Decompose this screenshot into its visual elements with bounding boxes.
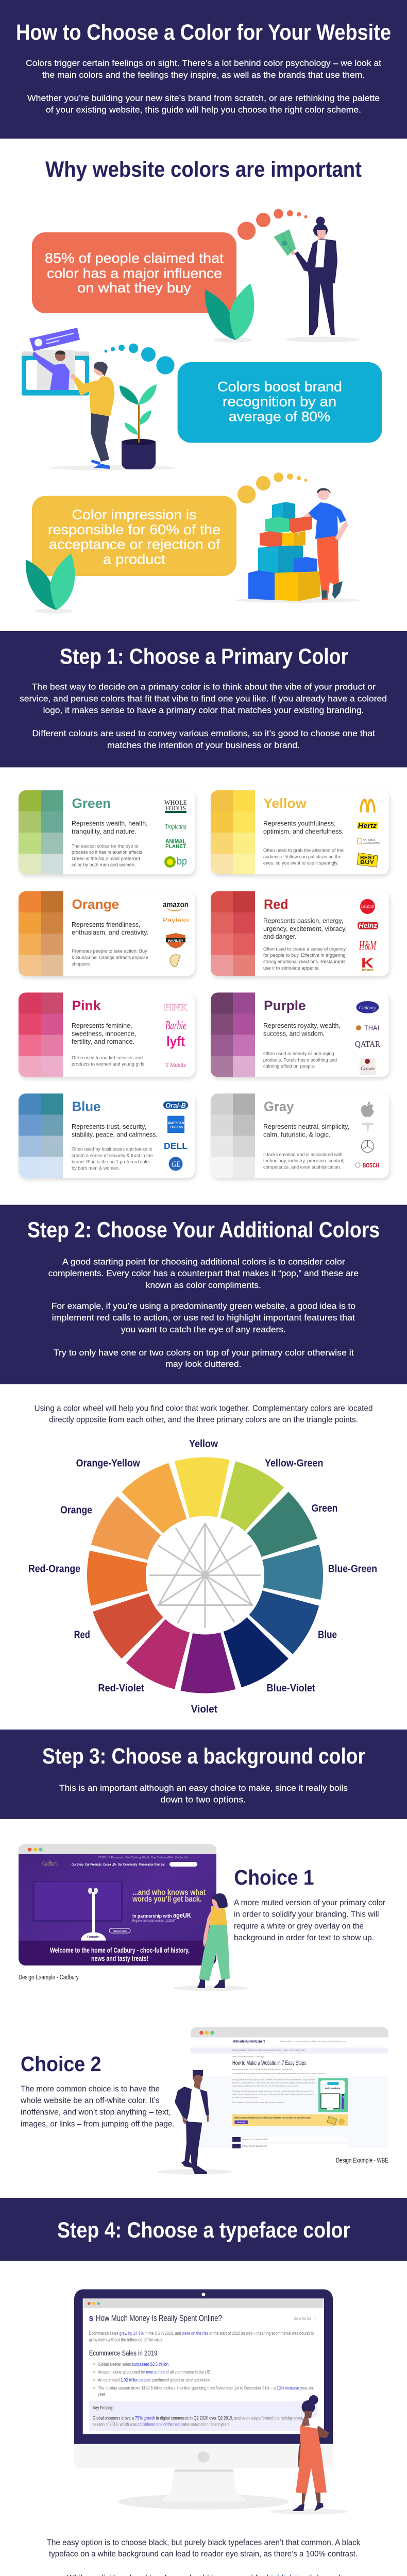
purple text: Often used in beauty or anti-aging xyxy=(263,1051,334,1056)
blue logos: Oral-B xyxy=(165,1101,186,1109)
browser: Cadbury example: Cadbury xyxy=(42,1860,58,1868)
yellow text: Yellow xyxy=(263,795,307,811)
text: typeface explanation: typeface on a white background can lead to reader eye strain, as there’s a 100% contrast. xyxy=(49,2550,358,2558)
gray logos: BOSCH xyxy=(363,1162,379,1169)
purple text: products. Purple has a soothing and xyxy=(263,1057,337,1062)
wheel labels: Orange xyxy=(60,1505,92,1516)
wheel labels: Yellow xyxy=(189,1438,218,1450)
illustration: woman in green trousers xyxy=(173,1893,249,1991)
blue logos: GE xyxy=(172,1160,180,1169)
callout: brand recognition: recognition by an xyxy=(223,394,336,409)
blue text: create a sense of security & trust in the xyxy=(72,1153,153,1158)
pink logos: T Mobile xyxy=(165,1061,186,1069)
green text: Green xyxy=(72,795,111,811)
callout: brand recognition xyxy=(178,362,382,443)
step 3 heading: Step 3: Choose a background color xyxy=(42,1744,365,1769)
step 1 text: The best way to decide on a primary color is to think about the vibe of your product or xyxy=(32,682,376,691)
icon: blue thought dots xyxy=(104,344,175,375)
orange swatches xyxy=(19,891,63,976)
choice 1 text: require a white or grey overlay on the xyxy=(234,1922,364,1930)
illustration: desktop monitor: ↑ xyxy=(314,2316,316,2321)
red logos: Heinz xyxy=(359,922,378,929)
card: purple xyxy=(211,992,389,1077)
card: red xyxy=(211,891,389,976)
green text: tranquility, and nature. xyxy=(72,828,137,835)
browser: Cadbury example: news and tasty treats! xyxy=(91,1954,148,1962)
red logos: CocaCola xyxy=(361,904,374,910)
wheel labels: Blue-Violet xyxy=(266,1683,315,1694)
wheel labels: Red xyxy=(74,1630,90,1641)
red logos: K xyxy=(361,955,374,971)
browser: WBE example xyxy=(191,2027,388,2148)
browser: WBE example: matter which option you go for, by the end of this post you’ll be able to build a website in an hour if xyxy=(232,2093,314,2095)
red text: strong emotional reactions. Restaurants xyxy=(263,959,346,964)
step 2 text: known as color compliments. xyxy=(146,1281,261,1290)
gray text: Represents neutral, simplicity, xyxy=(263,1123,349,1130)
red text: for people to buy. Effective in triggering xyxy=(263,953,346,958)
blue text: Often used by businesses and banks to xyxy=(72,1147,152,1152)
green logos: PLANET xyxy=(165,844,186,850)
orange logos: Payless xyxy=(162,917,189,924)
icon: orange thought dots xyxy=(238,209,307,240)
wheel labels: Red-Orange xyxy=(28,1564,80,1575)
yellow logos: NATIONAL xyxy=(363,839,376,842)
callout: brand recognition: average of 80% xyxy=(229,409,330,425)
illustration: desktop monitor: Key Finding: xyxy=(93,2405,113,2410)
blue logos: EXPRESS xyxy=(170,1126,183,1129)
callout: color impression: responsible for 60% of the xyxy=(48,522,221,537)
card: blue xyxy=(19,1093,195,1178)
browser: Cadbury example: ...and who knows what xyxy=(132,1888,206,1897)
step 3 text: This is an important although an easy choice to make, since it really boils xyxy=(59,1784,348,1793)
illustration: desktop monitor: The holiday season drove $142.5 billion dollars in online spending from November 1st to December 31st – a 13% increase year-on- xyxy=(98,2385,314,2391)
blue logos: DELL xyxy=(164,1141,188,1151)
step 1 text: logo, it makes sense to have a primary color that matches your existing branding. xyxy=(43,706,364,715)
wheel labels: Violet xyxy=(191,1704,217,1715)
blue text: Represents trust, security, xyxy=(72,1123,146,1130)
orange text: enthusiasm, and creativity. xyxy=(72,929,148,936)
browser: WBE example: Option 1: Use a Website Builder xyxy=(242,2138,268,2141)
red text: Often used to create a sense of urgency xyxy=(263,946,346,952)
illustration: desktop monitor: Global e-retail sales surpassed $3.5 trillion xyxy=(98,2362,168,2367)
browser: Cadbury example: Our Story Our Products Cocoa Life Our Community Personalise Your Bar xyxy=(72,1863,165,1867)
green swatches xyxy=(19,790,63,874)
browser: Cadbury example: ageUK xyxy=(173,1911,192,1919)
green text: Represents wealth, health, xyxy=(72,820,148,827)
blue text: stability, peace, and calmness. xyxy=(72,1131,158,1138)
purple logos: Crown xyxy=(361,1066,375,1071)
yellow logos: BEST xyxy=(360,855,375,861)
gray text: It lacks emotion and is associated with xyxy=(263,1152,343,1157)
illustration: desktop monitor: grow even without the influence of the virus. xyxy=(89,2337,163,2342)
red swatches xyxy=(211,891,255,976)
wheel center triangle and spokes xyxy=(150,1523,260,1628)
blue text xyxy=(72,1098,158,1171)
callout: brand recognition: Colors boost brand xyxy=(217,379,342,394)
pink swatches xyxy=(19,992,63,1077)
illustration: man in navy jacket xyxy=(157,2070,233,2175)
intro text: Colors trigger certain feelings on sight. There’s a lot behind color psychology – we look at xyxy=(26,59,381,68)
icon: leaves two xyxy=(26,553,75,614)
choice 2 text: images, or links – from jumping off the page. xyxy=(21,2120,174,2129)
step 2 text: For example, if you’re using a predominantly green website, a good idea is to xyxy=(52,1301,355,1311)
red text: and danger. xyxy=(263,933,297,940)
illustration: woman with money xyxy=(274,216,360,342)
illustration: desktop monitor: Ecommerce sales grew by 14.9% in the US in 2019, and were on the rise at the start of 2020 as well – meaning ecommerce was bound to xyxy=(89,2331,314,2336)
choice 1 text: background in order for text to show up. xyxy=(234,1934,374,1942)
green text: The easiest colour for the eye to xyxy=(72,844,138,849)
browser: WBE example: How to Make a Website in 7 Easy Steps xyxy=(232,2059,306,2066)
green text: color by both men and women. xyxy=(72,862,135,868)
browser: Cadbury example: words you’ll get back. xyxy=(132,1895,202,1904)
text: color wheel intro: Using a color wheel will help you find color that work together. Complementary colors are located xyxy=(34,1404,373,1413)
purple text xyxy=(263,997,341,1069)
purple text: Represents royalty, wealth, xyxy=(263,1022,341,1029)
illustration: desktop monitor: Amazon alone accounted for over a third of all ecommerce in the US xyxy=(98,2369,210,2375)
browser: WBE example: Building Websites Make Your Build How to Build Your Site Guides Site Building Tools xyxy=(232,2049,306,2052)
step 1 text xyxy=(20,682,387,750)
step 1 text: service, and peruse colors that fit that vibe to find one you like. If you already have a colored xyxy=(20,694,387,703)
gray text: Gray xyxy=(264,1098,294,1114)
wheel labels: Yellow-Green xyxy=(265,1458,323,1469)
icon: leaves xyxy=(205,283,254,343)
browser: WBE example: Which platform should you use to build your website? Find out with our 4 question quiz! xyxy=(234,2116,311,2120)
browser: Cadbury example: COVID-19 Response Visit Cadbury World Buy Cadbury Gifts Contact Us xyxy=(98,1856,189,1859)
browser: Cadbury example: Welcome to the home of Cadbury - choc-full of history, xyxy=(50,1946,190,1954)
blue logos: AMERICAN xyxy=(168,1122,184,1125)
yellow text: Represents youthfulness, xyxy=(263,820,336,827)
green logos xyxy=(164,799,187,868)
yellow logos: BUY xyxy=(360,860,374,866)
callout: color impression: acceptance or rejection of xyxy=(49,537,221,552)
red text xyxy=(263,896,347,971)
blue text: Blue xyxy=(72,1098,101,1114)
choice 1 text: in order to solidify your branding. This will xyxy=(234,1910,379,1919)
purple logos xyxy=(355,1001,381,1075)
orange text: Promotes people to take action: Buy xyxy=(72,948,147,954)
intro text xyxy=(26,59,381,114)
illustration: desktop monitor: How Much Money Is Really Spent Online? xyxy=(96,2313,222,2323)
red text: urgency, excitement, vibracy, xyxy=(263,925,347,933)
callout: 85 percent: 85% of people claimed that xyxy=(45,250,224,266)
wheel labels: Red-Violet xyxy=(98,1683,144,1694)
illustration: man with blocks xyxy=(235,488,360,603)
browser: Cadbury example: Donate xyxy=(87,1936,99,1939)
choice 1 text: Choice 1 xyxy=(234,1866,314,1889)
card: orange xyxy=(19,891,195,976)
gray text: technology, industry, precision, control, xyxy=(263,1158,344,1163)
step 1 text: matches the intention of your business or brand. xyxy=(107,741,300,750)
pink text: Often used to market services and xyxy=(72,1055,143,1060)
browser: WBE example: Take the quiz xyxy=(237,2121,245,2124)
blue text: brand. Blue is the no.1 preferred color xyxy=(72,1159,150,1164)
wheel labels: Orange-Yellow xyxy=(76,1458,140,1469)
illustration: desktop monitor: season of 2019, which was considered one of the best sales seasons in recent years. xyxy=(93,2422,230,2427)
green logos: Tropicana xyxy=(165,823,186,831)
orange text: Represents friendliness, xyxy=(72,921,140,928)
gray text: competence, and even sophistication. xyxy=(263,1164,341,1170)
pink logos: Barbie xyxy=(165,1019,186,1032)
green logos: WHOLE xyxy=(164,799,187,806)
yellow text: audience. Yellow can put strain on the xyxy=(263,854,342,859)
pink text: sweetness, innocence, xyxy=(72,1030,136,1038)
choice 1 text xyxy=(234,1866,385,1942)
pink logos: lyft xyxy=(166,1033,185,1049)
choice 2 text: inoffensive, and won’t stop anything – text, xyxy=(21,2108,171,2117)
browser: WBE example: WebsiteBuilderExpert xyxy=(233,2039,265,2043)
browser: Cadbury example xyxy=(19,1844,216,1965)
orange text: Orange xyxy=(72,896,119,912)
text: color wheel intro xyxy=(34,1404,373,1424)
wheel labels xyxy=(28,1438,377,1715)
yellow swatches xyxy=(211,790,255,874)
browser: Cadbury example: In partnership with xyxy=(132,1913,172,1919)
design example caption: Design Example - Cadbury xyxy=(19,1973,79,1981)
choice 1 text: A more muted version of your primary color xyxy=(234,1899,385,1907)
illustration: desktop monitor: An estimated 1.92 billion people purchased goods or services online xyxy=(98,2377,210,2382)
green text: process so it has relaxation effects. xyxy=(72,850,144,855)
pink text: Pink xyxy=(72,997,101,1013)
intro text: the main colors and the feelings they inspire, as well as the brands that use them. xyxy=(42,71,365,80)
gray logos xyxy=(355,1101,379,1169)
red logos: H&M xyxy=(359,939,377,953)
purple logos: QATAR xyxy=(355,1039,381,1049)
blue text: by both men & women. xyxy=(72,1165,120,1171)
browser: WBE example: Don’t believe us? Why not read on and give it a go for yourself? xyxy=(232,2101,285,2104)
gray swatches xyxy=(211,1093,255,1178)
illustration: desktop monitor: Go to the top xyxy=(294,2316,311,2321)
browser: WBE example: Website Builders Ecommerce Website Builders Web Hosting Email Marketing More xyxy=(280,2040,346,2043)
browser: WBE example: That said, WordPress is also a popular choice, so we’ll take you through both building processes. No xyxy=(232,2090,314,2092)
browser: WBE example: Last updated on October 1, 2021 by Hannah Whitfield in Building Websites | Comments (273) xyxy=(232,2068,293,2071)
step 3 text: down to two options. xyxy=(160,1795,246,1805)
card: green xyxy=(19,790,195,874)
blue logos xyxy=(163,1101,188,1171)
step 1 text: Different colours are used to convey various emotions, so it’s good to choose one that xyxy=(32,729,375,738)
illustration: desktop monitor: $ xyxy=(89,2314,93,2323)
green text xyxy=(72,795,148,868)
green logos: ANIMAL xyxy=(165,837,186,845)
step 2 text: may look cluttered. xyxy=(165,1360,241,1369)
browser: WBE example: you follow our seven easy steps. xyxy=(232,2096,259,2098)
purple swatches xyxy=(211,992,255,1077)
step 1 heading: Step 1: Choose a Primary Color xyxy=(60,645,348,669)
choice 2 text: Choice 2 xyxy=(21,2052,101,2076)
pink text: products to women and young girls. xyxy=(72,1061,146,1066)
yellow text: eyes, so you want to use it sparingly. xyxy=(263,860,338,866)
step 2 text: implement red calls to action, or use red to highlight important features that xyxy=(52,1313,355,1323)
illustration: man at browser window xyxy=(22,328,176,470)
illustration: desktop monitor xyxy=(74,2290,333,2510)
illustration: desktop monitor: year xyxy=(98,2392,105,2397)
design example caption two: Design Example - WBE xyxy=(336,2156,388,2164)
pink text: Represents feminine, xyxy=(72,1022,132,1029)
step 2 text: A good starting point for choosing additional colors is to consider color xyxy=(62,1257,345,1266)
callout: 85 percent: on what they buy xyxy=(77,280,192,296)
step 3 text xyxy=(59,1784,348,1805)
panel: step 4 xyxy=(0,2198,407,2261)
chart: color wheel xyxy=(28,1438,377,1715)
pink text xyxy=(72,997,146,1066)
callout: color impression: a product xyxy=(103,551,166,567)
yellow text xyxy=(263,795,344,866)
icon: yellow thought dots xyxy=(238,472,307,503)
pink logos xyxy=(164,1002,188,1069)
blue swatches xyxy=(19,1093,63,1178)
intro text: Whether you’re building your new site’s brand from scratch, or are rethinking the palette xyxy=(27,94,380,103)
purple text: success, and wisdom. xyxy=(263,1030,325,1038)
red text: use it to stimulate appetite. xyxy=(263,965,320,971)
browser: WBE example: Our independent research projects and impartial reviews are funded in part by affiliate commissions, at no extra cost to our readers. Learn more xyxy=(232,2072,326,2075)
purple logos: Cadbury xyxy=(359,1005,376,1011)
green text: Green is the No.2 most preferred xyxy=(72,856,140,861)
green logos: FOODS xyxy=(165,804,186,812)
step 2 text: you want to catch the eye of any readers. xyxy=(121,1325,286,1334)
browser: WBE example: Home › How to Make a Website › 7 Easy Steps xyxy=(232,2055,264,2058)
red text: Red xyxy=(264,896,288,912)
callout: color impression xyxy=(32,496,236,576)
orange text xyxy=(72,896,148,967)
panel: step 2 xyxy=(0,1205,407,1384)
wheel segments xyxy=(80,1450,330,1701)
orange text: shoppers. xyxy=(72,961,92,967)
step 2 text: complements. Every color has a counterpart that makes it “pop,” and these are xyxy=(48,1269,359,1278)
red text: Represents passion, energy, xyxy=(263,917,343,924)
wheel labels: Blue xyxy=(318,1630,337,1641)
purple logos: THAI xyxy=(364,1024,379,1032)
browser: Cadbury example: Registered charity number 1128267 xyxy=(132,1920,176,1923)
pink logos: PINK xyxy=(164,1002,188,1012)
browser: WBE example: Build a Website xyxy=(325,2087,340,2090)
choice 2 text: The more common choice is to have the xyxy=(21,2084,160,2093)
wheel labels: Blue-Green xyxy=(328,1564,377,1575)
heading: why colors are important: Why website colors are important xyxy=(45,157,362,182)
red logos xyxy=(358,899,378,972)
callout: color impression: Color impression is xyxy=(72,507,197,522)
orange logos: amazon xyxy=(163,901,189,909)
gray text: calm, futuristic, & logic. xyxy=(263,1131,331,1138)
step 2 text xyxy=(48,1257,359,1369)
text: typeface explanation: The easy option is to choose black, but purely black typefaces aren’t that common. A black xyxy=(47,2538,361,2547)
yellow logos: Hertz xyxy=(358,822,377,829)
card: pink xyxy=(19,992,195,1077)
step 4 heading: Step 4: Choose a typeface color xyxy=(57,2218,350,2243)
green logos: bp xyxy=(177,856,187,867)
wheel labels: Green xyxy=(312,1503,337,1514)
yellow text: Often used to grab the attention of the xyxy=(263,848,344,853)
purple text: Purple xyxy=(264,997,306,1013)
orange text: & Subscribe. Orange attracts impulse xyxy=(72,955,148,960)
yellow logos: GEOGRAPHIC xyxy=(363,842,380,845)
choice 2 text xyxy=(20,2052,175,2129)
browser: WBE example: builder or using WordPress. If this is your first rodeo, we recommend using a website builder like Wix, xyxy=(232,2081,315,2084)
step 2 text: Try to only have one or two colors on top of your primary color otherwise it xyxy=(54,1348,354,1358)
panel: header xyxy=(0,0,407,139)
card: yellow xyxy=(211,790,389,874)
illustration: desktop monitor: Global shoppers drove a 75% growth in digital commerce in Q2 2020 over Q2 2019, and even outperformed the holiday shopping xyxy=(93,2415,309,2420)
intro text: of your existing website, this guide will help you choose the right color scheme. xyxy=(46,105,361,114)
pink text: fertility, and romance. xyxy=(72,1038,134,1045)
panel: step 3 xyxy=(0,1730,407,1819)
callout: 85 percent: color has a major influence xyxy=(47,266,222,281)
gray text xyxy=(263,1098,349,1170)
red logos: kmart xyxy=(362,969,374,972)
orange logos: HARLEY xyxy=(168,940,183,943)
browser: WBE example: Squarespace, or Weebly to create your site – it’s the best option for most novices. xyxy=(232,2084,298,2087)
panel: step 1 xyxy=(0,631,407,767)
choice 2 text: whole website be an off-white color. It’s xyxy=(20,2096,160,2105)
card: gray xyxy=(211,1093,389,1178)
purple text: calming effect on people. xyxy=(263,1064,315,1069)
illustration: desktop monitor: Ecommerce Sales in 2019 xyxy=(89,2349,157,2357)
yellow logos xyxy=(357,799,380,867)
text: color wheel intro: directly opposite from each other, and the three primary colors are on the triangle points. xyxy=(49,1416,358,1424)
illustration: woman in orange jumpsuit xyxy=(271,2395,347,2514)
yellow text: optimism, and cheerfulness. xyxy=(263,828,344,835)
callout: 85 percent xyxy=(32,232,236,313)
browser: WBE example: Although there are many ways to build a website, there are two that are first-easiest: using a website xyxy=(232,2078,315,2081)
text: typeface explanation xyxy=(47,2538,361,2576)
browser: Cadbury example: FIND OUT MORE xyxy=(113,1930,127,1933)
orange logos xyxy=(162,901,189,967)
browser: WBE example: Using a Website Builder FAQs xyxy=(242,2145,267,2147)
